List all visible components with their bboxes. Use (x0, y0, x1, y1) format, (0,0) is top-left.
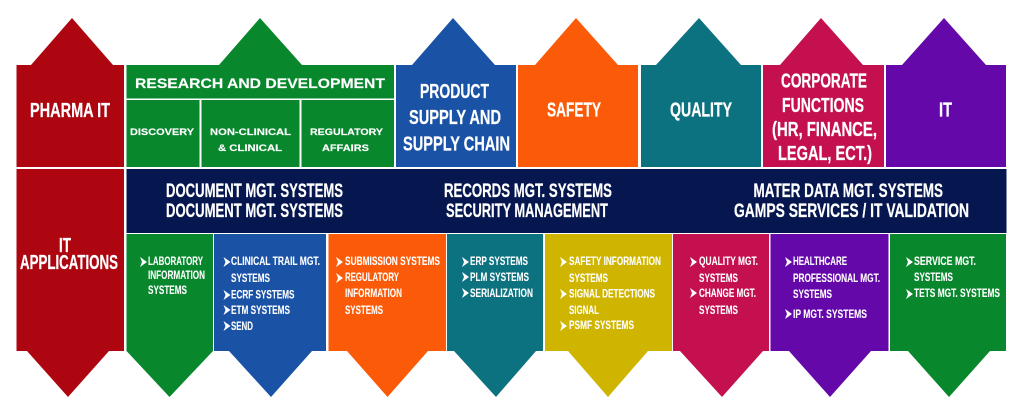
panel: clinical systems: ECRF SYSTEMS (231, 290, 295, 302)
panel: clinical systems: SEND (231, 321, 253, 333)
panel: Corporate Functions: FUNCTIONS (782, 95, 864, 117)
panel: Safety: SAFETY (547, 100, 601, 122)
panel: Product Supply and Supply Chain: SUPPLY CHAIN (403, 134, 510, 156)
panel: quality systems (673, 234, 769, 397)
panel: shared systems band: DOCUMENT MGT. SYSTEMS (166, 200, 343, 222)
panel: healthcare and IP systems: HEALTHCARE (793, 256, 847, 268)
panel: Safety (518, 18, 638, 167)
panel: quality systems: SYSTEMS (699, 273, 738, 285)
panel: submission systems: SUBMISSION SYSTEMS (345, 256, 440, 268)
panel: laboratory systems (126, 234, 213, 397)
panel: Quality (641, 18, 761, 167)
panel: shared systems band: MATER DATA MGT. SYSTEMS (754, 180, 943, 202)
panel: laboratory systems: LABORATORY (148, 256, 203, 268)
panel: Quality: QUALITY (670, 100, 732, 122)
panel: healthcare and IP systems: SYSTEMS (793, 289, 832, 301)
panel: safety systems (545, 234, 672, 397)
panel: service and test systems: SERVICE MGT. (914, 256, 976, 268)
panel: submission systems: REGULATORY (345, 272, 399, 284)
panel: shared systems band: RECORDS MGT. SYSTEMS (444, 180, 612, 202)
panel: Product Supply and Supply Chain: PRODUCT (420, 81, 489, 103)
panel: IT: IT (939, 100, 952, 122)
panel: Corporate Functions: LEGAL, ECT.) (778, 143, 872, 165)
panel: shared systems band: DOCUMENT MGT. SYSTEMS (166, 180, 343, 202)
panel: ERP systems: SERIALIZATION (470, 288, 533, 300)
panel: IT Applications (16, 169, 124, 397)
panel: Research and Development: & CLINICAL (218, 143, 282, 154)
panel: clinical systems: SYSTEMS (231, 273, 270, 285)
panel: safety systems: SAFETY INFORMATION (569, 256, 661, 268)
panel: IT (886, 18, 1006, 167)
panel: laboratory systems: INFORMATION (148, 270, 205, 282)
panel: ERP systems (447, 234, 543, 397)
panel: clinical systems: CLINICAL TRAIL MGT. (231, 256, 320, 268)
panel: service and test systems (890, 234, 1006, 397)
panel: Product Supply and Supply Chain: SUPPLY AND (409, 107, 501, 129)
panel: submission systems (328, 234, 446, 397)
panel: shared systems band: SECURITY MANAGEMENT (446, 200, 608, 222)
panel: Corporate Functions: (HR, FINANCE, (772, 119, 877, 141)
panel: healthcare and IP systems: IP MGT. SYSTEMS (793, 309, 867, 321)
panel: submission systems: INFORMATION (345, 288, 402, 300)
panel: quality systems: QUALITY MGT. (699, 256, 758, 268)
panel: ERP systems: PLM SYSTEMS (470, 272, 529, 284)
panel: clinical systems (214, 234, 326, 397)
panel: safety systems: SIGNAL DETECTIONS (569, 288, 655, 300)
panel: Corporate Functions: CORPORATE (781, 70, 867, 92)
panel: service and test systems: SYSTEMS (914, 272, 953, 284)
panel: Research and Development: RESEARCH AND DEVELOPMENT (135, 75, 385, 91)
panel: submission systems: SYSTEMS (345, 305, 383, 317)
panel: Corporate Functions (763, 18, 884, 167)
panel: IT Applications: APPLICATIONS (20, 252, 118, 274)
panel: laboratory systems: SYSTEMS (148, 285, 187, 297)
panel: quality systems: CHANGE MGT. (699, 288, 756, 300)
panel: IT Applications: IT (59, 235, 71, 257)
panel: Research and Development: AFFAIRS (322, 143, 369, 154)
panel: Research and Development (126, 18, 394, 167)
panel: safety systems: PSMF SYSTEMS (569, 320, 634, 332)
panel: healthcare and IP systems (770, 234, 888, 397)
panel: safety systems: SYSTEMS (569, 273, 608, 285)
panel: Pharma IT: PHARMA IT (30, 100, 110, 122)
panel: Research and Development: REGULATORY (310, 127, 384, 138)
panel: shared systems band (126, 169, 1006, 233)
panel: quality systems: SYSTEMS (699, 305, 738, 317)
panel: healthcare and IP systems: PROFESSIONAL MGT. (793, 273, 880, 285)
panel: Product Supply and Supply Chain (396, 18, 516, 167)
panel: safety systems: SIGNAL (569, 305, 599, 317)
panel: clinical systems: ETM SYSTEMS (231, 305, 290, 317)
panel: Research and Development: DISCOVERY (130, 127, 195, 138)
panel: Pharma IT (16, 18, 124, 167)
panel: Research and Development: NON-CLINICAL (210, 127, 291, 138)
panel: ERP systems: ERP SYSTEMS (470, 256, 528, 268)
